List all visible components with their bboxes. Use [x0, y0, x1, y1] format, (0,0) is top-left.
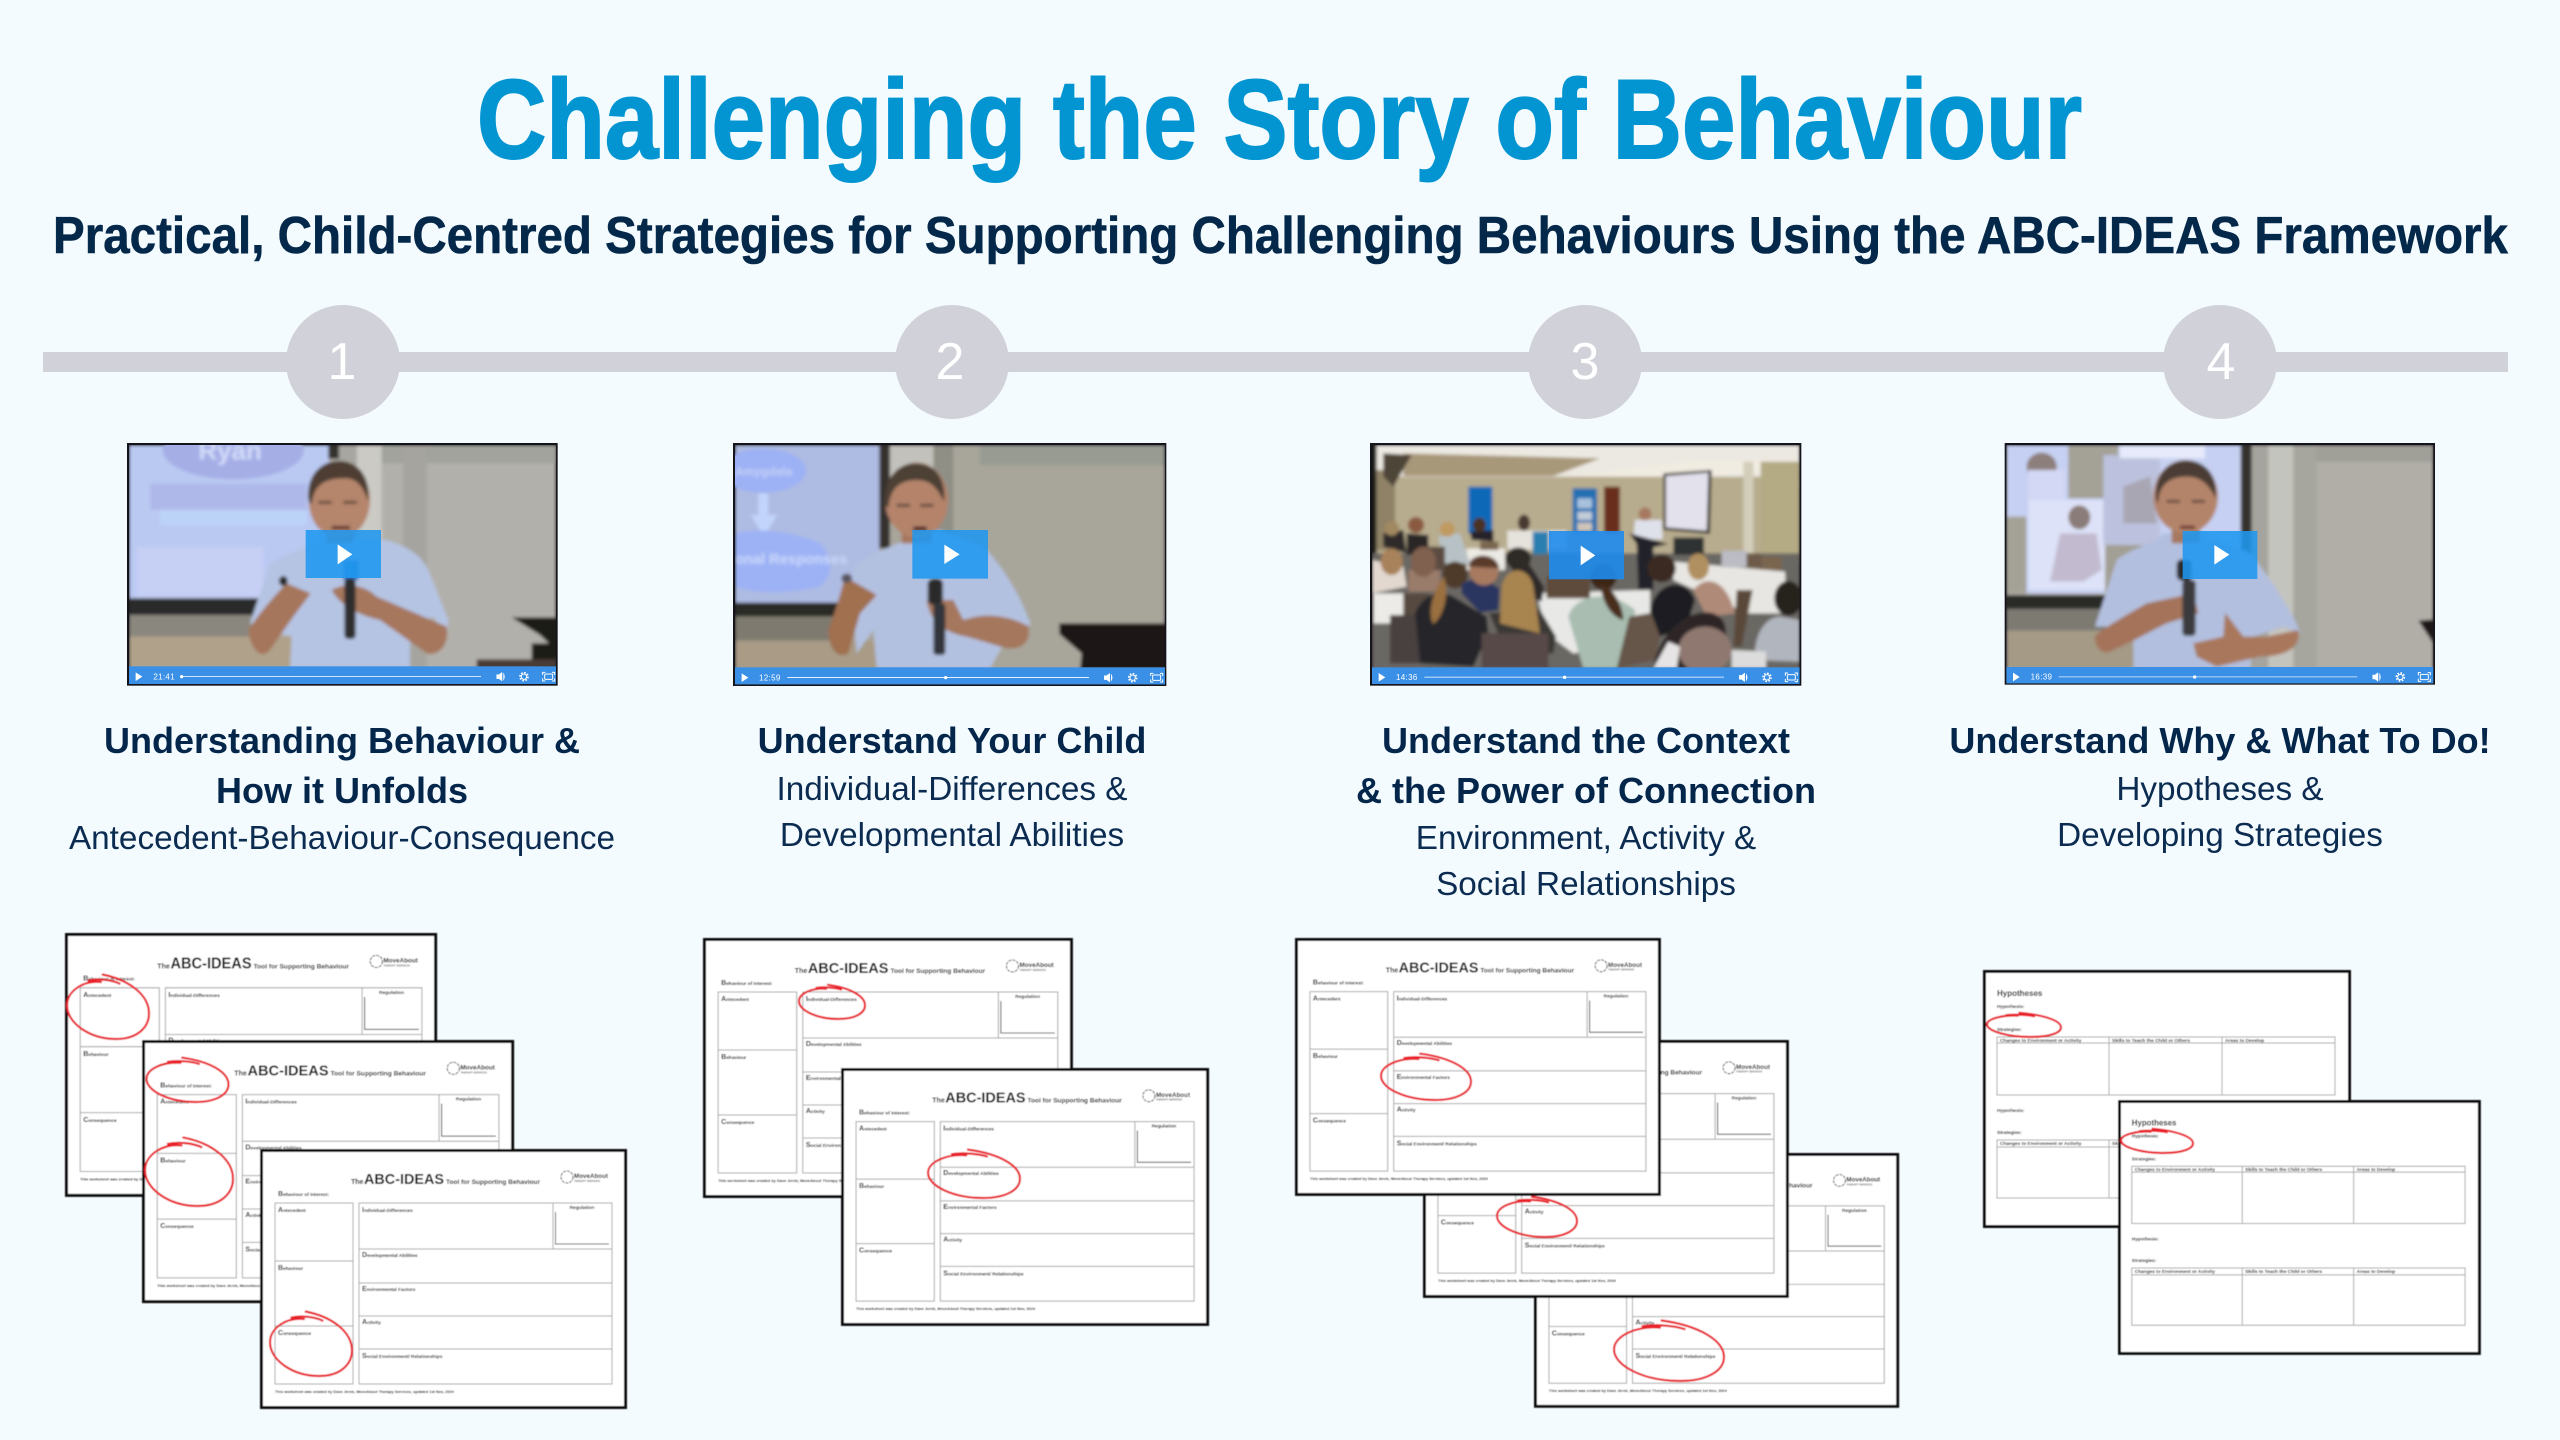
step 4 text [1949, 720, 2491, 854]
worksheet: antecedent circled: Consequence [83, 1116, 117, 1124]
worksheet: antecedent circled: Social Environment/ Relationships [168, 1139, 250, 1147]
play button [912, 530, 988, 579]
worksheet: individual differences circled: Behaviour [721, 1054, 746, 1061]
worksheet: behaviour of interest and behaviour circled: This worksheet was created by Dave Jereb, MoveAbout Therapy Services, updated 1st Nov, 2024 [157, 1283, 339, 1288]
step 4 marker: 4 [2207, 333, 2235, 391]
worksheet: consequence circled: Regulation [570, 1205, 594, 1211]
worksheet: individual differences circled: Tool for Supporting Behaviour [890, 968, 986, 975]
worksheet: antecedent circled: Environmental Factors [168, 1071, 223, 1079]
worksheet: developmental abilities circled: Activity [943, 1237, 963, 1244]
worksheet: activity circled [1424, 1041, 1787, 1296]
worksheet: individual differences circled: Consequence [721, 1119, 755, 1126]
worksheet: environmental factors circled: Developmental Abilities [1397, 1040, 1452, 1047]
player controls [735, 667, 1165, 685]
worksheet: developmental abilities circled: Regulation [1152, 1124, 1176, 1130]
red circle annotation [145, 1137, 233, 1206]
video 2 thumbnail [721, 443, 1166, 686]
worksheet: behaviour of interest and behaviour circled: Antecedent [160, 1098, 189, 1106]
worksheet: social environment circled: Social Environment/ Relationships [1635, 1353, 1716, 1360]
step 3 marker [1528, 305, 1642, 419]
worksheet: behaviour of interest and behaviour circled: ABC-IDEAS [247, 1062, 329, 1079]
player controls: 21:41 [153, 672, 175, 681]
worksheet: developmental abilities circled: Behaviour [859, 1183, 884, 1190]
worksheet: environmental factors circled: Consequence [1313, 1118, 1346, 1125]
worksheet stack 3 [1296, 939, 1898, 1406]
worksheet: consequence circled: MoveAbout [574, 1173, 609, 1180]
worksheet: individual differences circled: Developmental Abilities [806, 1041, 862, 1048]
worksheet: behaviour of interest and behaviour circled: Tool for Supporting Behaviour [331, 1070, 426, 1077]
step 1 text: Antecedent-Behaviour-Consequence [69, 820, 615, 857]
step 4 text: Hypotheses & [2116, 771, 2324, 808]
player controls: 16:39 [2031, 673, 2053, 682]
worksheet: social environment circled: MoveAbout [1846, 1176, 1881, 1183]
worksheet: consequence circled: Developmental Abilities [362, 1252, 418, 1259]
worksheet: antecedent circled: Activity [168, 1105, 188, 1113]
worksheet: activity circled: Activity [1525, 1209, 1544, 1216]
video 2 thumbnail: onal Responses [735, 552, 847, 568]
worksheet: consequence circled: Tool for Supporting Behaviour [446, 1179, 540, 1186]
step 1 text [69, 720, 615, 857]
red circle annotation [146, 1058, 229, 1102]
worksheet: consequence circled: Social Environment/ Relationships [362, 1353, 443, 1360]
worksheet: antecedent circled: Developmental Abilities [168, 1037, 225, 1045]
worksheet: hypothesis circled: Skills to Teach the Child or Others [2245, 1167, 2322, 1173]
worksheet: social environment circled: Regulation [1842, 1208, 1867, 1214]
worksheet: social environment circled: Individual-Differences [1635, 1210, 1686, 1217]
worksheet: developmental abilities circled: Antecedent [859, 1126, 887, 1132]
worksheet: consequence circled: Activity [362, 1319, 381, 1326]
worksheet: antecedent circled: Behaviour of Interest: [83, 975, 135, 983]
video 1 thumbnail: Ryan [198, 435, 262, 465]
worksheet: environmental factors circled: Behaviour of Interest: [1313, 980, 1364, 987]
worksheet: individual differences circled [705, 940, 1071, 1196]
player controls [1372, 667, 1800, 685]
worksheet: developmental abilities circled: Environmental Factors [943, 1204, 997, 1211]
video 2 thumbnail: Amygdala [735, 465, 793, 479]
worksheet: antecedent circled: Individual-Differences [168, 991, 220, 999]
worksheet: environmental factors circled: This worksheet was created by Dave Jereb, MoveAbout Therapy Services, updated 1st Nov, 2024 [1310, 1176, 1489, 1181]
worksheet: social environment circled: Activity [1635, 1320, 1655, 1326]
worksheet: environmental factors circled: Antecedent [1313, 996, 1341, 1002]
step 2 text: Understand Your Child [758, 720, 1146, 761]
play button [1549, 531, 1624, 579]
worksheet: antecedent circled: This worksheet was created by Dave Jereb, MoveAbout Therapy Services, updated 1st Nov, 2024 [80, 1177, 262, 1182]
worksheet: activity circled: THERAPY SERVICES [1736, 1070, 1762, 1074]
step 1 text: Understanding Behaviour & [104, 720, 580, 761]
worksheet: developmental abilities circled: This worksheet was created by Dave Jereb, MoveAbout Therapy Services, updated 1st Nov, 2024 [856, 1306, 1036, 1311]
worksheet: environmental factors circled: MoveAbout [1608, 962, 1643, 969]
worksheet: developmental abilities circled: Tool for Supporting Behaviour [1028, 1098, 1122, 1105]
worksheet: strategies circled: Strategies: [1997, 1130, 2022, 1136]
worksheet: strategies circled [1984, 972, 2350, 1226]
worksheet: behaviour of interest and behaviour circled: The [234, 1069, 247, 1077]
player controls: 12:59 [759, 673, 781, 682]
worksheet: consequence circled: Antecedent [278, 1207, 306, 1214]
worksheet: behaviour of interest and behaviour circled: Social Environment/ Relationships [245, 1246, 327, 1254]
worksheet stack 1 [67, 935, 626, 1408]
worksheet stack 2 [705, 940, 1208, 1324]
worksheet: hypothesis circled: Strategies: [2132, 1258, 2157, 1264]
worksheet: consequence circled: Behaviour [278, 1265, 303, 1272]
red circle annotation [67, 974, 149, 1039]
worksheet: developmental abilities circled: The [932, 1098, 945, 1105]
step 3 text: Environment, Activity & [1416, 820, 1756, 857]
worksheet: developmental abilities circled: Consequence [859, 1248, 892, 1255]
worksheet: individual differences circled: Regulation [1015, 994, 1040, 1000]
play button [306, 530, 381, 578]
red circle annotation [1614, 1320, 1724, 1381]
worksheet: activity circled: Tool for Supporting Behaviour [1608, 1070, 1703, 1077]
player controls [2006, 667, 2433, 684]
worksheet: hypothesis circled: Hypothesis: [2132, 1236, 2159, 1242]
red circle annotation [1497, 1197, 1577, 1237]
worksheet: hypothesis circled: Areas to Develop [2357, 1167, 2395, 1173]
worksheet: social environment circled: Developmental Abilities [1635, 1254, 1691, 1261]
worksheet: behaviour of interest and behaviour circled: Activity [245, 1211, 265, 1219]
worksheet: consequence circled: The [351, 1179, 364, 1186]
worksheet: consequence circled: This worksheet was created by Dave Jereb, MoveAbout Therapy Services, updated 1st Nov, 2024 [275, 1389, 455, 1394]
worksheet stack 4 [1984, 972, 2479, 1353]
red circle annotation [928, 1150, 1020, 1198]
worksheet: environmental factors circled: Tool for Supporting Behaviour [1480, 968, 1575, 975]
worksheet: hypothesis circled: Changes to Environment or Activity [2135, 1269, 2215, 1275]
worksheet: social environment circled: Consequence [1552, 1330, 1585, 1337]
worksheet: environmental factors circled: Behaviour [1313, 1053, 1338, 1060]
step 4 marker [2163, 305, 2277, 419]
step 4 text: Understand Why & What To Do! [1949, 720, 2491, 761]
worksheet: individual differences circled: Individual-Differences [806, 996, 857, 1003]
worksheet: individual differences circled: Environmental Factors [806, 1075, 860, 1082]
worksheet: environmental factors circled: Environmental Factors [1397, 1074, 1450, 1081]
worksheet: antecedent circled: Tool for Supporting Behaviour [254, 964, 349, 971]
red circle annotation [1987, 1013, 2061, 1037]
worksheet: strategies circled: Areas to Develop [2225, 1038, 2264, 1044]
worksheet: activity circled: Social Environment/ Relationships [1525, 1242, 1605, 1249]
worksheet: behaviour of interest and behaviour circled: Regulation [456, 1097, 481, 1103]
worksheet: activity circled: Behaviour [1441, 1155, 1466, 1162]
worksheet: antecedent circled: The [157, 963, 170, 971]
worksheet: antecedent circled: MoveAbout [383, 957, 419, 964]
worksheet: activity circled: ABC-IDEAS [1527, 1063, 1606, 1079]
video 4 thumbnail [2005, 443, 2435, 685]
worksheet: developmental abilities circled: ABC-IDEAS [945, 1090, 1026, 1107]
timeline [43, 305, 2508, 419]
step 3 text: Social Relationships [1436, 866, 1736, 903]
red circle annotation [1381, 1054, 1471, 1100]
worksheet: hypothesis circled [2119, 1101, 2479, 1353]
video 3 thumbnail [1370, 443, 1802, 686]
worksheet: individual differences circled: Behaviour of Interest: [721, 980, 773, 987]
worksheet: activity circled: Developmental Abilities [1525, 1142, 1580, 1149]
video 1 thumbnail [127, 421, 558, 686]
worksheet: behaviour of interest and behaviour circled: Developmental Abilities [245, 1143, 302, 1151]
worksheet: behaviour of interest and behaviour circled: Environmental Factors [245, 1178, 300, 1186]
step 3 marker: 3 [1571, 333, 1599, 391]
worksheet: consequence circled: Individual-Differences [362, 1207, 413, 1214]
step 2 marker [895, 305, 1009, 419]
worksheet: antecedent circled: Behaviour [83, 1050, 109, 1058]
worksheet: consequence circled: THERAPY SERVICES [574, 1179, 600, 1183]
worksheet: social environment circled: Environmental Factors [1635, 1287, 1689, 1294]
worksheet: activity circled: The [1514, 1070, 1526, 1077]
worksheet: hypothesis circled: Skills to Teach the Child or Others [2245, 1269, 2322, 1275]
worksheet: antecedent circled: Antecedent [83, 991, 112, 999]
worksheet: behaviour of interest and behaviour circled: Individual-Differences [245, 1098, 297, 1106]
worksheet: environmental factors circled: THERAPY SERVICES [1608, 968, 1634, 972]
worksheet: developmental abilities circled: THERAPY SERVICES [1156, 1098, 1182, 1102]
worksheet: hypothesis circled: Areas to Develop [2357, 1269, 2395, 1275]
worksheet: developmental abilities circled: Behaviour of Interest: [859, 1110, 911, 1117]
title: Challenging the Story of Behaviour [477, 57, 2082, 182]
step 1 text: How it Unfolds [216, 770, 468, 811]
worksheet: social environment circled: THERAPY SERVICES [1846, 1182, 1873, 1186]
worksheet: activity circled: Individual-Differences [1525, 1098, 1576, 1104]
worksheet: hypothesis circled: Strategies: [2132, 1156, 2157, 1162]
worksheet: social environment circled [1535, 1154, 1898, 1406]
worksheet: social environment circled: ABC-IDEAS [1637, 1175, 1717, 1191]
worksheet: social environment circled: This worksheet was created by Dave Jereb, MoveAbout Therapy Services, updated 1st Nov, 2024 [1549, 1389, 1728, 1393]
worksheet: individual differences circled: The [795, 968, 807, 975]
worksheet: social environment circled: Behaviour of Interest: [1552, 1194, 1603, 1201]
step 3 text: & the Power of Connection [1356, 770, 1816, 811]
worksheet: strategies circled: Changes to Environment or Activity [2000, 1141, 2082, 1147]
worksheet: strategies circled: Hypothesis: [1997, 1004, 2025, 1010]
worksheet: environmental factors circled: The [1386, 968, 1398, 975]
red circle annotation [270, 1311, 352, 1376]
worksheet: behaviour of interest and behaviour circled [144, 1042, 513, 1302]
red circle annotation [799, 985, 865, 1019]
worksheet: activity circled: Antecedent [1441, 1098, 1469, 1104]
step 2 marker: 2 [936, 333, 964, 391]
worksheet: hypothesis circled: Hypotheses [2132, 1119, 2177, 1128]
worksheet: consequence circled: Consequence [278, 1330, 311, 1337]
worksheet: hypothesis circled: Hypothesis: [2132, 1134, 2159, 1140]
step 1 marker [286, 305, 400, 419]
worksheet: individual differences circled: MoveAbout [1020, 962, 1055, 969]
worksheet: strategies circled: Hypothesis: [1997, 1108, 2025, 1114]
worksheet: antecedent circled: THERAPY SERVICES [383, 963, 410, 967]
step 2 text: Developmental Abilities [780, 817, 1124, 854]
worksheet: behaviour of interest and behaviour circled: MoveAbout [460, 1064, 496, 1071]
worksheet: antecedent circled: ABC-IDEAS [170, 956, 252, 973]
worksheet: strategies circled: Hypotheses [1997, 989, 2043, 998]
play button [2183, 531, 2257, 579]
worksheet: environmental factors circled: Regulation [1604, 994, 1628, 1000]
worksheet: antecedent circled: Regulation [379, 990, 404, 996]
worksheet: social environment circled: Behaviour [1552, 1267, 1577, 1274]
worksheet: developmental abilities circled: Social Environment/ Relationships [943, 1270, 1024, 1277]
worksheet: individual differences circled: THERAPY SERVICES [1020, 968, 1046, 972]
worksheet: behaviour of interest and behaviour circled: Consequence [160, 1222, 194, 1230]
step 3 text [1356, 720, 1816, 903]
worksheet: consequence circled [262, 1150, 626, 1408]
worksheet: individual differences circled: This worksheet was created by Dave Jereb, MoveAbout Therapy Services, updated 1st Nov, 2024 [718, 1178, 899, 1183]
player controls: 14:36 [1396, 673, 1418, 682]
worksheet: developmental abilities circled [843, 1069, 1208, 1324]
worksheet: consequence circled: Environmental Factors [362, 1286, 416, 1293]
worksheet: hypothesis circled: Changes to Environment or Activity [2135, 1167, 2215, 1173]
worksheet: consequence circled: Behaviour of Interest: [278, 1191, 330, 1198]
worksheet: strategies circled: Areas to Develop [2225, 1141, 2264, 1147]
worksheet: activity circled: Environmental Factors [1525, 1176, 1578, 1183]
red circle annotation [2121, 1129, 2193, 1153]
worksheet: individual differences circled: Antecedent [721, 996, 749, 1003]
worksheet: individual differences circled: ABC-IDEAS [808, 960, 888, 977]
step 2 text [758, 720, 1146, 854]
worksheet: activity circled: MoveAbout [1736, 1064, 1771, 1071]
worksheet: antecedent circled [67, 935, 436, 1195]
step 4 text: Developing Strategies [2057, 817, 2383, 854]
worksheet: environmental factors circled: Activity [1397, 1107, 1416, 1114]
worksheet: social environment circled: The [1625, 1182, 1637, 1189]
worksheet: consequence circled: ABC-IDEAS [364, 1171, 444, 1188]
worksheet: developmental abilities circled: Individual-Differences [943, 1126, 994, 1132]
step 3 text: Understand the Context [1382, 720, 1790, 761]
worksheet: strategies circled: Skills to Teach the Child or Others [2112, 1141, 2190, 1147]
player controls [129, 666, 556, 685]
worksheet: environmental factors circled: Social Environment/ Relationships [1397, 1140, 1477, 1147]
step 1 marker: 1 [328, 333, 356, 391]
worksheet: activity circled: Behaviour of Interest: [1441, 1082, 1492, 1089]
worksheet: activity circled: This worksheet was created by Dave Jereb, MoveAbout Therapy Services, updated 1st Nov, 2024 [1438, 1278, 1617, 1283]
worksheet: individual differences circled: Social Environment/ Relationships [806, 1142, 887, 1149]
worksheet: behaviour of interest and behaviour circled: THERAPY SERVICES [460, 1070, 487, 1074]
worksheet: behaviour of interest and behaviour circled: Behaviour [160, 1156, 186, 1164]
worksheet: individual differences circled: Activity [806, 1108, 825, 1115]
worksheet: strategies circled: Skills to Teach the Child or Others [2112, 1038, 2190, 1044]
step 2 text: Individual-Differences & [776, 771, 1128, 808]
worksheet: strategies circled: Strategies: [1997, 1027, 2022, 1033]
worksheet: environmental factors circled: Individual-Differences [1397, 996, 1448, 1002]
worksheet: developmental abilities circled: Developmental Abilities [943, 1170, 999, 1177]
worksheet: behaviour of interest and behaviour circled: Behaviour of Interest: [160, 1082, 213, 1090]
worksheet: strategies circled: Changes to Environment or Activity [2000, 1038, 2082, 1044]
worksheet: environmental factors circled: ABC-IDEAS [1399, 961, 1478, 977]
worksheet: environmental factors circled [1296, 939, 1659, 1194]
worksheet: activity circled: Regulation [1732, 1096, 1756, 1102]
worksheet: activity circled: Consequence [1441, 1220, 1474, 1227]
worksheet: developmental abilities circled: MoveAbout [1156, 1092, 1191, 1099]
worksheet: social environment circled: Tool for Supporting Behaviour [1719, 1182, 1813, 1189]
worksheet: social environment circled: Antecedent [1552, 1210, 1580, 1217]
